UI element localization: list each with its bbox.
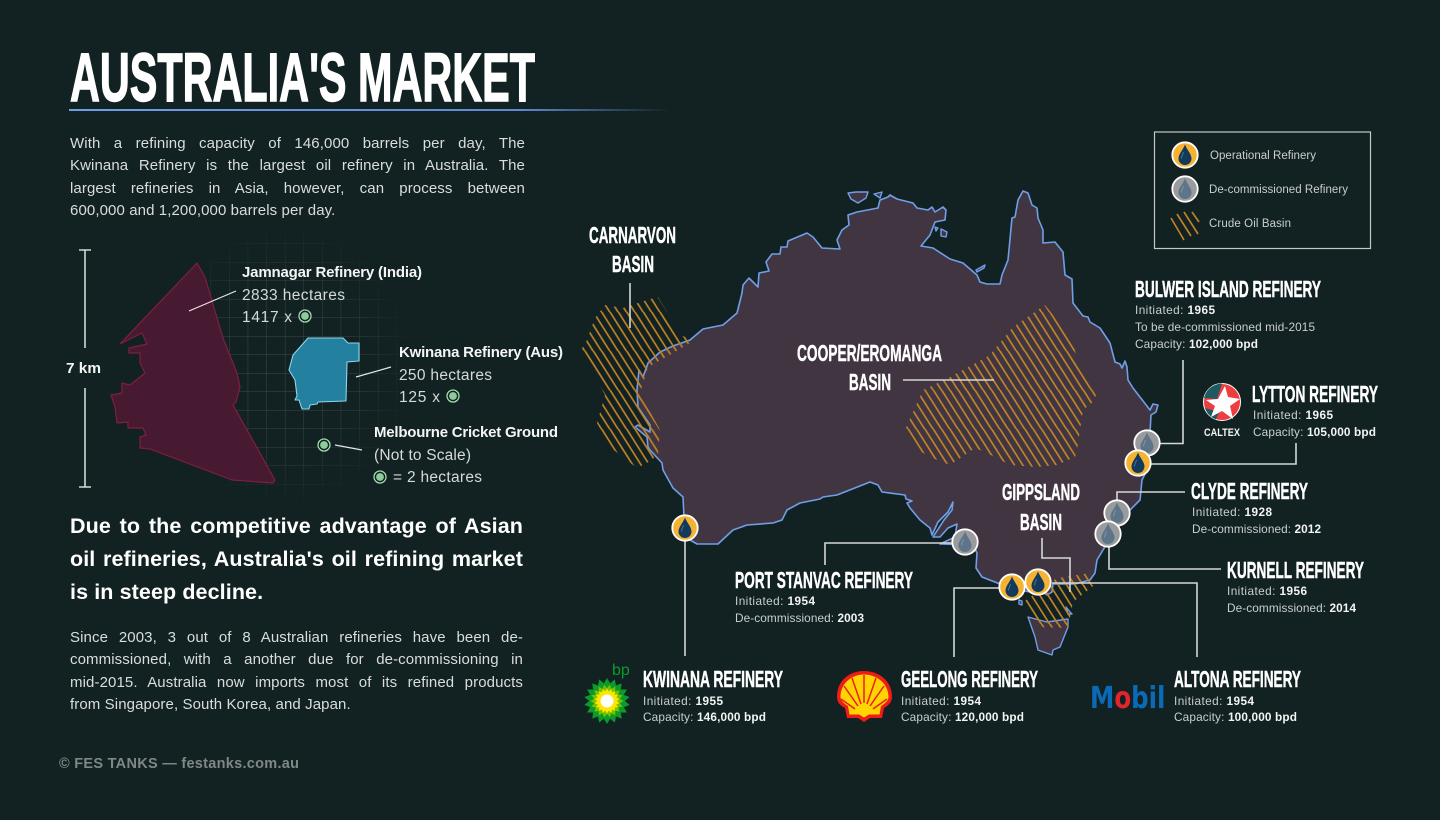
refinery: Lytton: Capacity: 105,000 bpd bbox=[1253, 425, 1376, 439]
logo: BP: bp bbox=[612, 662, 630, 679]
Kwinana label: 250 hectares bbox=[399, 367, 492, 384]
Jamnagar refinery shape bbox=[111, 263, 275, 483]
7 km scale bar bbox=[66, 250, 101, 487]
key statement bbox=[70, 514, 523, 604]
Melbourne Cricket Ground label: (Not to Scale) bbox=[374, 447, 471, 464]
legend: Crude Oil Basin bbox=[1209, 218, 1291, 230]
key statement: is in steep decline. bbox=[70, 580, 263, 604]
intro paragraph: 600,000 and 1,200,000 barrels per day. bbox=[70, 202, 335, 219]
closing paragraph: from Singapore, South Korea, and Japan. bbox=[70, 696, 351, 713]
Kwinana refinery shape bbox=[289, 338, 359, 409]
refinery: Bulwer Island: To be de-commissioned mid-2015 bbox=[1135, 320, 1315, 334]
legend bbox=[1154, 132, 1370, 248]
Jamnagar label: 2833 hectares bbox=[242, 287, 345, 304]
logo: Caltex bbox=[1204, 384, 1241, 439]
Melbourne Cricket Ground label: = 2 hectares bbox=[393, 469, 482, 486]
7 km scale bar: 7 km bbox=[66, 360, 101, 377]
refinery: Clyde bbox=[1191, 478, 1321, 536]
Jamnagar label bbox=[242, 264, 422, 326]
refinery: Geelong: Initiated: 1954 bbox=[901, 694, 981, 708]
refinery: Bulwer Island: BULWER ISLAND REFINERY bbox=[1135, 276, 1321, 302]
refinery markers bbox=[672, 430, 1160, 600]
legend: Operational Refinery bbox=[1210, 150, 1316, 162]
Melbourne Cricket Ground label: Melbourne Cricket Ground bbox=[374, 424, 558, 441]
refinery: Lytton: Initiated: 1965 bbox=[1253, 408, 1333, 422]
legend: De-commissioned Refinery bbox=[1209, 184, 1348, 196]
title underline bbox=[69, 109, 671, 111]
basin label: Carnarvon: CARNARVON bbox=[589, 222, 676, 248]
refinery: Port Stanvac: Initiated: 1954 bbox=[735, 594, 815, 608]
title: AUSTRALIA'S MARKET bbox=[70, 39, 535, 116]
basin label: Gippsland: BASIN bbox=[1020, 509, 1062, 535]
islands bbox=[848, 192, 1072, 655]
refinery: Clyde: CLYDE REFINERY bbox=[1191, 478, 1308, 504]
logo: Shell bbox=[837, 671, 892, 722]
Gippsland basin hatch bbox=[1022, 573, 1097, 628]
size comparison diagram bbox=[66, 236, 562, 494]
Kwinana label bbox=[399, 344, 563, 406]
refinery: Geelong: GEELONG REFINERY bbox=[901, 666, 1038, 692]
refinery: Altona bbox=[1090, 666, 1301, 724]
closing paragraph: Since 2003, 3 out of 8 Australian refineries have been de- bbox=[70, 629, 523, 646]
leader lines bbox=[189, 291, 391, 450]
Jamnagar label: 1417 x bbox=[242, 309, 292, 326]
refinery: Kwinana bbox=[584, 662, 783, 725]
refinery: Kurnell: Initiated: 1956 bbox=[1227, 584, 1307, 598]
refinery: Geelong bbox=[837, 666, 1038, 724]
closing paragraph: mid-2015. Australia now imports most of its refined products bbox=[70, 674, 523, 691]
Carnarvon basin hatch bbox=[580, 297, 693, 468]
logo: Caltex: CALTEX bbox=[1204, 427, 1241, 439]
refinery: Altona: Initiated: 1954 bbox=[1174, 694, 1254, 708]
Cooper/Eromanga basin hatch bbox=[905, 305, 1097, 467]
intro paragraph: Kwinana Refinery is the largest oil refinery in Australia. The bbox=[70, 157, 525, 174]
footer credit: © FES TANKS — festanks.com.au bbox=[59, 756, 299, 772]
key statement: Due to the competitive advantage of Asian bbox=[70, 514, 523, 538]
mainland bbox=[635, 191, 1158, 595]
refinery: Altona: Capacity: 100,000 bpd bbox=[1174, 710, 1297, 724]
refinery: Clyde: Initiated: 1928 bbox=[1192, 505, 1272, 519]
refinery: Bulwer Island bbox=[1135, 276, 1321, 351]
Jamnagar label: Jamnagar Refinery (India) bbox=[242, 264, 422, 281]
logo: BP bbox=[584, 662, 637, 725]
basin label: Gippsland: GIPPSLAND bbox=[1002, 479, 1080, 505]
closing paragraph: commissioned, with a another due for de-commissioning in bbox=[70, 651, 523, 668]
refinery: Clyde: De-commissioned: 2012 bbox=[1192, 522, 1321, 536]
refinery: Geelong: Capacity: 120,000 bpd bbox=[901, 710, 1024, 724]
basin label: Cooper/Eromanga: COOPER/EROMANGA bbox=[797, 340, 942, 366]
callout lines bbox=[630, 283, 1296, 657]
basin label: Carnarvon: BASIN bbox=[612, 251, 654, 277]
refinery: Port Stanvac bbox=[735, 567, 913, 625]
basin label: Cooper/Eromanga bbox=[797, 340, 942, 395]
refinery: Port Stanvac: PORT STANVAC REFINERY bbox=[735, 567, 913, 593]
Kwinana label: Kwinana Refinery (Aus) bbox=[399, 344, 563, 361]
intro paragraph bbox=[70, 135, 525, 219]
refinery: Kurnell bbox=[1227, 557, 1364, 615]
refinery: Bulwer Island: Initiated: 1965 bbox=[1135, 303, 1215, 317]
map of Australia bbox=[580, 191, 1158, 655]
refinery: Kwinana: Initiated: 1955 bbox=[643, 694, 723, 708]
Melbourne Cricket Ground label bbox=[318, 424, 558, 486]
logo: Mobil: Mobil bbox=[1090, 682, 1165, 716]
basin label: Gippsland bbox=[1002, 479, 1080, 535]
basin label: Cooper/Eromanga: BASIN bbox=[849, 369, 891, 395]
intro paragraph: With a refining capacity of 146,000 barrels per day, The bbox=[70, 135, 525, 152]
intro paragraph: largest refineries in Asia, however, can process between bbox=[70, 180, 525, 197]
closing paragraph bbox=[70, 629, 523, 713]
key statement: oil refineries, Australia's oil refining market bbox=[70, 547, 523, 571]
refinery: Altona: ALTONA REFINERY bbox=[1174, 666, 1301, 692]
Kwinana label: 125 x bbox=[399, 389, 440, 406]
refinery: Lytton bbox=[1204, 381, 1378, 439]
refinery: Kurnell: De-commissioned: 2014 bbox=[1227, 601, 1356, 615]
refinery: Kwinana: KWINANA REFINERY bbox=[643, 666, 783, 692]
refinery: Kwinana: Capacity: 146,000 bpd bbox=[643, 710, 766, 724]
refinery: Port Stanvac: De-commissioned: 2003 bbox=[735, 611, 864, 625]
basin label: Carnarvon bbox=[589, 222, 676, 277]
refinery: Bulwer Island: Capacity: 102,000 bpd bbox=[1135, 337, 1258, 351]
